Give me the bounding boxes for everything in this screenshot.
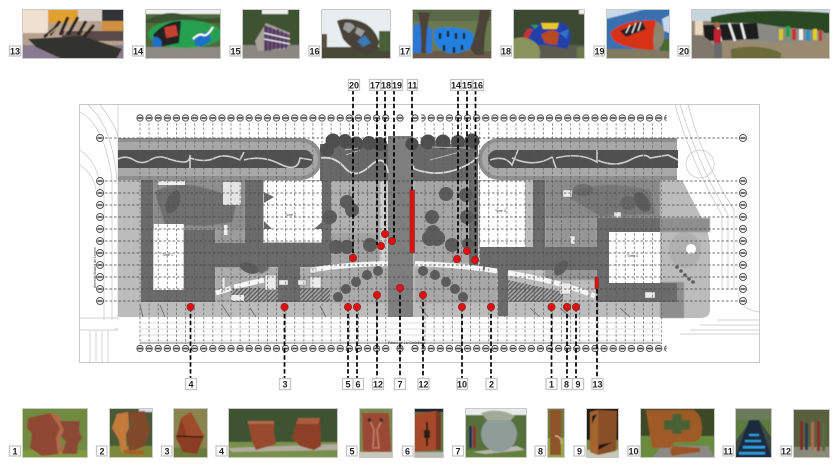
left track bbox=[118, 138, 322, 180]
towers: white blocks: Torre 2 bbox=[285, 213, 296, 217]
plan labels bottom: 3 bbox=[282, 380, 288, 390]
photo 1: rust sculpture bbox=[10, 408, 88, 458]
towers: white blocks: Torre 3 bbox=[495, 209, 506, 213]
plan labels bottom: 7 bbox=[397, 380, 403, 390]
photo 5: rust slab bbox=[346, 408, 393, 458]
photo 7: wire sphere bbox=[452, 408, 527, 458]
photo 18: multicolour rock bbox=[501, 9, 585, 59]
photo 14: painted rock bbox=[132, 9, 222, 59]
photo 15: striped rock bbox=[230, 9, 300, 59]
photo 9: rust cube bbox=[574, 408, 619, 458]
plan labels top: 20 bbox=[349, 80, 359, 90]
plan labels bottom: 8 bbox=[564, 380, 569, 390]
plan labels top: 11 bbox=[408, 80, 417, 90]
plan labels top: 17 bbox=[370, 80, 380, 90]
towers: white blocks bbox=[154, 181, 696, 290]
plan labels top: 19 bbox=[392, 80, 402, 90]
plan labels bottom: 12 bbox=[418, 380, 429, 390]
photo 12: painted posts: 12 bbox=[781, 446, 791, 456]
right track bbox=[478, 138, 678, 180]
photo 6: rust slab with figure cutout bbox=[402, 408, 444, 458]
plan labels bottom: 9 bbox=[575, 380, 581, 390]
plan labels bottom: 1 bbox=[549, 380, 554, 390]
photo 16: boulder: 16 bbox=[309, 46, 320, 56]
photo 11: blue-lit installation bbox=[723, 408, 772, 458]
plan labels bottom: 2 bbox=[489, 380, 494, 390]
hatched terraces bbox=[231, 280, 563, 302]
photo 15: striped rock: 15 bbox=[230, 46, 241, 56]
photo 2: rust sculpture bbox=[96, 408, 153, 458]
towers: white blocks: Torre 4 bbox=[627, 254, 638, 258]
grid lines bbox=[105, 122, 738, 344]
lower paving bbox=[118, 305, 662, 344]
photo 6: rust slab with figure cutout: 6 bbox=[405, 446, 410, 456]
plan labels top: 16 bbox=[473, 80, 483, 90]
photo 17: blue rock among trees: 17 bbox=[400, 46, 410, 56]
red markers bbox=[187, 190, 599, 311]
plan labels bottom: 12 bbox=[373, 380, 383, 390]
grid axis bubbles: Paseo de La Castellana bbox=[388, 341, 425, 345]
photo 3: rust sculpture bbox=[162, 408, 208, 458]
plan labels bottom: 10 bbox=[457, 380, 467, 390]
photo 8: tall rust column bbox=[535, 408, 565, 458]
mottled gardens bbox=[150, 180, 710, 318]
plan labels bottom bbox=[186, 378, 603, 390]
plan labels bottom: 6 bbox=[355, 380, 361, 390]
photo 4: paired rust sculptures: 4 bbox=[219, 446, 224, 456]
plan labels bottom: 13 bbox=[592, 380, 603, 390]
photo 2: rust sculpture: 2 bbox=[99, 446, 105, 456]
photo 3: rust sculpture: 3 bbox=[164, 446, 170, 456]
dark paved bands bbox=[141, 136, 677, 316]
photo 19: red rock bbox=[594, 9, 670, 59]
photo 20: long painted rock: 20 bbox=[679, 46, 689, 56]
towers: white blocks: Torre 1 bbox=[162, 253, 173, 257]
main ground bbox=[118, 180, 710, 318]
photo 12: painted posts bbox=[781, 409, 830, 458]
plan labels top: 15 bbox=[462, 80, 472, 90]
photo 1: rust sculpture: 1 bbox=[12, 446, 18, 456]
photo 19: red rock: 19 bbox=[594, 46, 605, 56]
photo 14: painted rock: 14 bbox=[133, 46, 143, 56]
photo 10: curved rust sheet: 10 bbox=[628, 446, 639, 456]
photo 4: paired rust sculptures bbox=[216, 408, 338, 458]
small pavilions bbox=[222, 190, 655, 298]
road lines bbox=[80, 104, 760, 362]
photo 11: blue-lit installation: 11 bbox=[723, 446, 733, 456]
photo 20: long painted rock bbox=[678, 9, 830, 59]
photo 9: rust cube: 9 bbox=[577, 446, 582, 456]
plan labels bottom: 4 bbox=[188, 380, 194, 390]
leader lines bbox=[190, 90, 597, 378]
garden trees bbox=[162, 184, 695, 302]
photo 18: multicolour rock: 18 bbox=[501, 46, 511, 56]
photo 7: wire sphere: 7 bbox=[455, 446, 461, 456]
photo 13: dark sculpture in atrium bbox=[10, 9, 124, 59]
photo 8: tall rust column: 8 bbox=[538, 446, 543, 456]
panel: site plan bbox=[80, 104, 760, 362]
grid axis bubbles: Avenida Madrid de Lemos bbox=[93, 247, 97, 288]
photo 5: rust slab: 5 bbox=[349, 446, 355, 456]
curved white promenade bbox=[216, 264, 595, 296]
plan labels bottom: 5 bbox=[345, 380, 351, 390]
central plaza with trees bbox=[320, 134, 480, 181]
plan labels top: 14 bbox=[451, 80, 461, 90]
central road bbox=[388, 136, 413, 317]
photo 13: dark sculpture in atrium: 13 bbox=[10, 46, 20, 56]
photo 10: curved rust sheet bbox=[628, 408, 715, 458]
plan labels top bbox=[348, 80, 484, 90]
photo 16: boulder bbox=[309, 9, 391, 59]
plan labels top: 18 bbox=[381, 80, 391, 90]
grid axis bubbles bbox=[93, 114, 746, 352]
photo 17: blue rock among trees bbox=[400, 9, 492, 59]
